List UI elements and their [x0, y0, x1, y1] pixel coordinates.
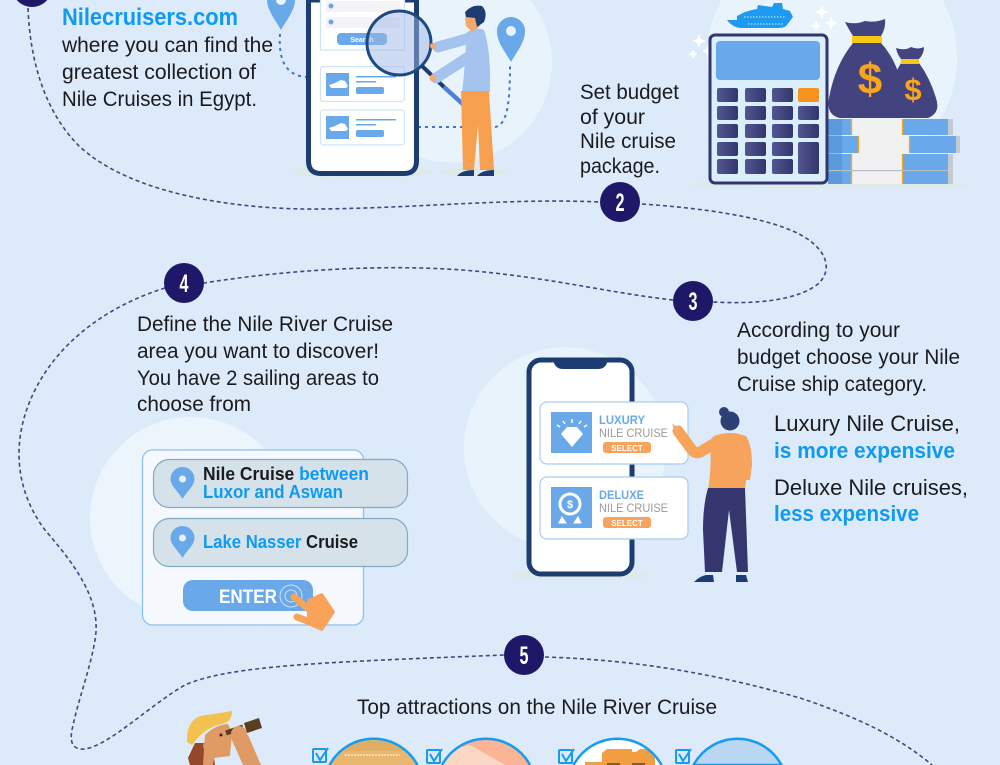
step 3 number badge [673, 281, 713, 321]
intro line 1: According to your [737, 319, 900, 342]
step 5 heading: Top attractions on the Nile River Cruise [357, 696, 717, 719]
description line 2: greatest collection of [62, 61, 256, 84]
calculator [710, 35, 827, 183]
step 4 number badge [164, 263, 204, 303]
line 4: package. [580, 155, 660, 178]
luxury card: SELECT [611, 444, 643, 453]
icon: pointing hand [294, 594, 334, 630]
deluxe price: less expensive [774, 501, 919, 526]
step 3 text [737, 319, 968, 526]
cruise ship icon [727, 3, 793, 28]
left pin [267, 0, 295, 30]
enter button: ENTER [219, 587, 277, 608]
deluxe card: SELECT [611, 519, 643, 528]
step 2 number badge [600, 182, 640, 222]
luxury card: NILE CRUISE [599, 426, 668, 440]
large money bag [828, 19, 903, 118]
attraction 3 checkbox [559, 749, 574, 763]
site name: Nilecruisers.com [62, 4, 238, 31]
luxury price: is more expensive [774, 438, 955, 463]
attraction 4 checkbox [676, 749, 691, 763]
step 5 number badge: 5 [520, 642, 529, 670]
step 5 number badge [504, 635, 544, 675]
option: Lake Nasser [154, 518, 408, 566]
step 2 number badge: 2 [616, 189, 624, 217]
background circle: step 3 [464, 347, 666, 549]
step 3 illustration: category selection [510, 360, 752, 582]
sparkles [689, 6, 837, 58]
deluxe card: $ [567, 499, 573, 511]
step 2 illustration: budget [689, 3, 970, 188]
step 4 number badge: 4 [180, 270, 189, 298]
small money bag: $ [904, 72, 922, 107]
luxury card: LUXURY [599, 413, 645, 427]
line 3: Nile cruise [580, 130, 676, 153]
small money bag [885, 47, 937, 118]
person pointing [672, 407, 752, 582]
deluxe card [540, 477, 688, 539]
background circle: step 2 [707, 0, 957, 182]
result card 1 [320, 66, 404, 102]
option: Luxor and Aswan [154, 460, 408, 508]
attraction 3 [574, 739, 662, 765]
deluxe card: NILE CRUISE [599, 501, 668, 515]
money stacks [828, 119, 960, 184]
person [430, 6, 494, 176]
option: Luxor and Aswan: Luxor and Aswan [203, 482, 343, 502]
magnifier [367, 11, 466, 107]
step 1 illustration: phone search [267, 0, 525, 178]
search form: Search [350, 37, 374, 44]
step 1 text [61, 4, 273, 111]
attraction 2 [442, 739, 530, 765]
large money bag: $ [858, 55, 882, 104]
luxury label: Luxury Nile Cruise, [774, 411, 960, 436]
attraction 4 [694, 739, 782, 765]
line 1: Define the Nile River Cruise [137, 313, 393, 336]
description line 1: where you can find the [61, 34, 273, 57]
line 4: choose from [137, 393, 251, 416]
line 1: Set budget [580, 81, 679, 104]
line 2: of your [580, 106, 645, 129]
line 2: area you want to discover! [137, 340, 379, 363]
attraction 1 [330, 739, 418, 765]
option: Lake Nasser: Lake Nasser Cruise [203, 532, 358, 552]
deluxe card: DELUXE [599, 488, 644, 502]
option: Luxor and Aswan: Nile Cruise between [203, 464, 369, 484]
attraction 1 checkbox [313, 748, 328, 762]
attraction 2 checkbox [427, 749, 442, 763]
step 4 panel: sailing areas [142, 450, 408, 630]
search form [320, 0, 404, 50]
phone body [308, 0, 416, 174]
right pin [497, 17, 525, 62]
step 3 number badge: 3 [688, 288, 698, 316]
explorer with telescope [187, 711, 262, 765]
deluxe label: Deluxe Nile cruises, [774, 475, 968, 500]
background circle: step 4 [90, 417, 292, 619]
step 4 text [137, 313, 393, 416]
phone [529, 360, 632, 574]
enter button [183, 580, 313, 611]
intro line 2: budget choose your Nile [737, 346, 960, 369]
background circle: step 1 [352, 0, 552, 163]
step 2 text [580, 81, 679, 178]
luxury card [540, 402, 688, 464]
intro line 3: Cruise ship category. [737, 373, 927, 396]
result card 2 [320, 110, 404, 145]
line 3: You have 2 sailing areas to [137, 367, 379, 390]
step 1 number badge [17, 0, 47, 7]
description line 3: Nile Cruises in Egypt. [62, 88, 257, 111]
